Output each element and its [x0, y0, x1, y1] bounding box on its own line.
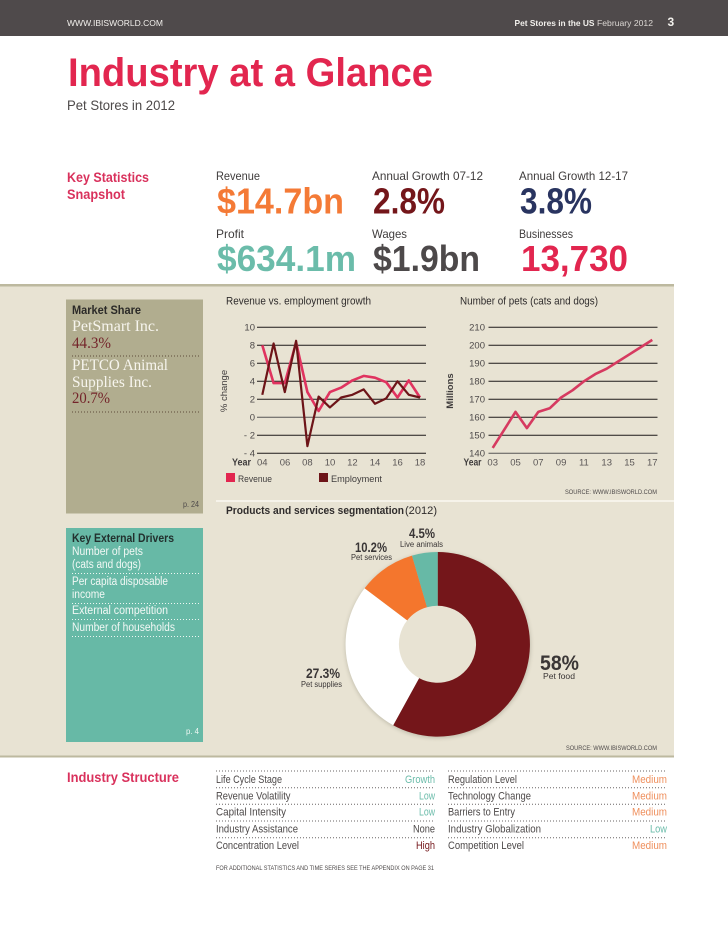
- chart: revenue vs employment growth: 10: [325, 458, 335, 468]
- panel: key statistics: $14.7bn: [217, 180, 344, 222]
- chart: revenue vs employment growth: % change: [219, 370, 230, 412]
- panel: key statistics: 2.8%: [373, 180, 445, 222]
- chart: revenue vs employment growth: 8: [250, 340, 255, 352]
- chart: revenue vs employment growth: - 4: [244, 448, 255, 460]
- chart: revenue vs employment growth: [219, 296, 426, 485]
- donut segment: pet food 58%: [393, 552, 530, 737]
- donut segment: live animals 4.5%: [412, 552, 438, 607]
- label: pet food: Pet food: [543, 672, 575, 681]
- label: pet supplies: [301, 665, 342, 689]
- chart: number of pets: 160: [469, 412, 485, 424]
- chart: number of pets: 170: [469, 394, 485, 406]
- panel: key statistics: 13,730: [521, 238, 628, 279]
- panel: key external drivers: Per capita disposable: [72, 576, 168, 588]
- label: live animals: 4.5%: [409, 525, 435, 541]
- table: industry structure left column: High: [416, 840, 435, 852]
- label: live animals: [400, 525, 443, 549]
- panel: key external drivers: income: [72, 589, 105, 601]
- chart: revenue vs employment growth: 14: [370, 458, 380, 468]
- header bar: Pet Stores in the US: [514, 18, 595, 28]
- label: pet services: Pet services: [351, 553, 392, 562]
- panel: key statistics: 3.8%: [520, 180, 592, 222]
- chart: revenue vs employment growth: 4: [250, 376, 255, 388]
- header bar: [0, 0, 728, 36]
- panel: market share: 44.3%: [72, 335, 111, 352]
- label: pet supplies: 27.3%: [306, 665, 340, 681]
- table: industry structure right column: Medium: [632, 806, 667, 818]
- legend: Employment: [331, 474, 382, 485]
- footnote: FOR ADDITIONAL STATISTICS AND TIME SERIES SEE THE APPENDIX ON PAGE 31: [216, 865, 434, 872]
- table: industry structure left column: Concentration Level: [216, 840, 299, 852]
- panel: key external drivers: p. 4: [186, 727, 200, 736]
- table: industry structure right column: Medium: [632, 774, 667, 786]
- chart: number of pets: 180: [469, 376, 485, 388]
- panel: key external drivers: Number of households: [72, 622, 175, 634]
- panel: key external drivers: (cats and dogs): [72, 559, 141, 571]
- heading: key statistics snapshot: [67, 169, 149, 202]
- chart: number of pets: 05: [510, 458, 521, 468]
- chart: number of pets: 11: [579, 458, 589, 468]
- chart: number of pets: 210: [469, 322, 485, 334]
- chart: number of pets: 03: [487, 458, 498, 468]
- header bar: WWW.IBISWORLD.COM: [67, 18, 163, 28]
- chart: number of pets: [445, 296, 658, 496]
- table: industry structure right column: Medium: [632, 840, 667, 852]
- chart: revenue vs employment growth: - 2: [244, 430, 255, 442]
- table: industry structure left column: Industry Assistance: [216, 824, 298, 836]
- table: industry structure left column: [216, 771, 435, 852]
- label: pet services: [351, 539, 392, 562]
- chart: number of pets: 200: [469, 340, 485, 352]
- chart: revenue vs employment growth: 08: [302, 458, 313, 468]
- table: industry structure right column: Technology Change: [448, 790, 531, 802]
- chart: revenue vs employment growth: 12: [347, 458, 358, 468]
- chart: number of pets: 140: [469, 448, 485, 460]
- panel: market share: 20.7%: [72, 390, 110, 407]
- chart: products and services segmentation: Products and services segmentation: [226, 505, 404, 517]
- panel: key external drivers: Number of pets: [72, 546, 143, 558]
- panel: key external drivers: Key External Drivers: [72, 531, 174, 545]
- panel: key statistics: Profit: [216, 227, 245, 241]
- table: industry structure left column: Low: [419, 806, 435, 818]
- table: industry structure left column: Capital Intensity: [216, 806, 286, 818]
- chart: products and services segmentation: SOURCE: WWW.IBISWORLD.COM: [566, 745, 657, 752]
- chart: number of pets: 150: [469, 430, 485, 442]
- panel: market share: Market Share: [72, 303, 141, 317]
- label: pet services: 10.2%: [355, 539, 387, 555]
- heading: key statistics snapshot: Snapshot: [67, 186, 125, 202]
- panel: market share: p. 24: [183, 500, 199, 509]
- title: Industry at a Glance: [68, 51, 433, 95]
- label: live animals: Live animals: [400, 540, 443, 549]
- chart: products and services segmentation: [226, 505, 657, 752]
- legend: Revenue: [238, 474, 272, 485]
- table: industry structure left column: Growth: [405, 774, 435, 786]
- chart: number of pets: 07: [533, 458, 544, 468]
- chart: number of pets: 190: [469, 358, 485, 370]
- donut segment: pet supplies 27.3%: [346, 588, 419, 725]
- table: industry structure right column: Barriers to Entry: [448, 806, 515, 818]
- panel: key statistics: $1.9bn: [373, 238, 480, 279]
- panel: key external drivers: [66, 528, 203, 742]
- panel: market share: [66, 300, 203, 514]
- chart: revenue vs employment growth: 04: [257, 458, 268, 468]
- panel: key statistics: Businesses: [519, 227, 573, 241]
- table: industry structure left column: Low: [419, 790, 435, 802]
- panel: market share: PETCO Animal: [72, 357, 169, 374]
- chart: products and services segmentation: (2012): [405, 505, 437, 517]
- table: industry structure right column: Regulation Level: [448, 774, 517, 786]
- chart: revenue vs employment growth: 18: [415, 458, 425, 468]
- chart: number of pets: Year: [464, 458, 482, 468]
- table: industry structure right column: Competition Level: [448, 840, 524, 852]
- chart: number of pets: 15: [624, 458, 635, 468]
- chart: number of pets: 13: [601, 458, 612, 468]
- panel: key external drivers: External competition: [72, 605, 168, 617]
- label: pet food: 58%: [540, 652, 579, 675]
- chart: number of pets: Number of pets (cats and dogs): [460, 296, 598, 308]
- panel: market share: Supplies Inc.: [72, 374, 152, 391]
- heading: key statistics snapshot: Key Statistics: [67, 169, 149, 185]
- panel: key statistics: $634.1m: [217, 238, 356, 279]
- header bar: February 2012: [597, 18, 653, 28]
- donut segment: pet services 10.2%: [365, 556, 427, 620]
- label: pet supplies: Pet supplies: [301, 680, 342, 689]
- table: industry structure right column: Industry Globalization: [448, 824, 541, 836]
- panel: key statistics: Annual Growth 12-17: [519, 169, 628, 183]
- chart: revenue vs employment growth: 10: [244, 322, 255, 334]
- table: industry structure left column: Life Cycle Stage: [216, 774, 282, 786]
- chart: revenue vs employment growth: 6: [250, 358, 255, 370]
- chart: number of pets: 17: [647, 458, 658, 468]
- heading: industry structure: Industry Structure: [67, 769, 179, 785]
- panel: beige background band: [0, 284, 674, 758]
- chart: number of pets: 09: [556, 458, 566, 468]
- chart: revenue vs employment growth: 2: [250, 394, 255, 406]
- table: industry structure right column: Low: [650, 824, 667, 836]
- table: industry structure left column: Revenue Volatility: [216, 790, 291, 802]
- panel: key statistics: [216, 169, 628, 279]
- legend: [226, 473, 382, 485]
- panel: key statistics: Annual Growth 07-12: [372, 169, 483, 183]
- panel: key statistics: Wages: [372, 227, 407, 241]
- subtitle: Pet Stores in 2012: [67, 97, 175, 113]
- table: industry structure left column: None: [413, 824, 435, 836]
- chart: number of pets: SOURCE: WWW.IBISWORLD.COM: [565, 489, 657, 496]
- panel: key statistics: Revenue: [216, 169, 260, 183]
- chart: number of pets: Millions: [445, 373, 456, 409]
- chart: revenue vs employment growth: 16: [392, 458, 403, 468]
- chart: revenue vs employment growth: 0: [250, 412, 255, 424]
- table: industry structure right column: Medium: [632, 790, 667, 802]
- header bar: 3: [668, 15, 674, 29]
- chart: revenue vs employment growth: Revenue vs. employment growth: [226, 296, 371, 308]
- chart: revenue vs employment growth: 06: [280, 458, 290, 468]
- chart: revenue vs employment growth: Year: [232, 458, 251, 468]
- table: industry structure right column: [448, 771, 667, 852]
- panel: market share: PetSmart Inc.: [72, 318, 159, 335]
